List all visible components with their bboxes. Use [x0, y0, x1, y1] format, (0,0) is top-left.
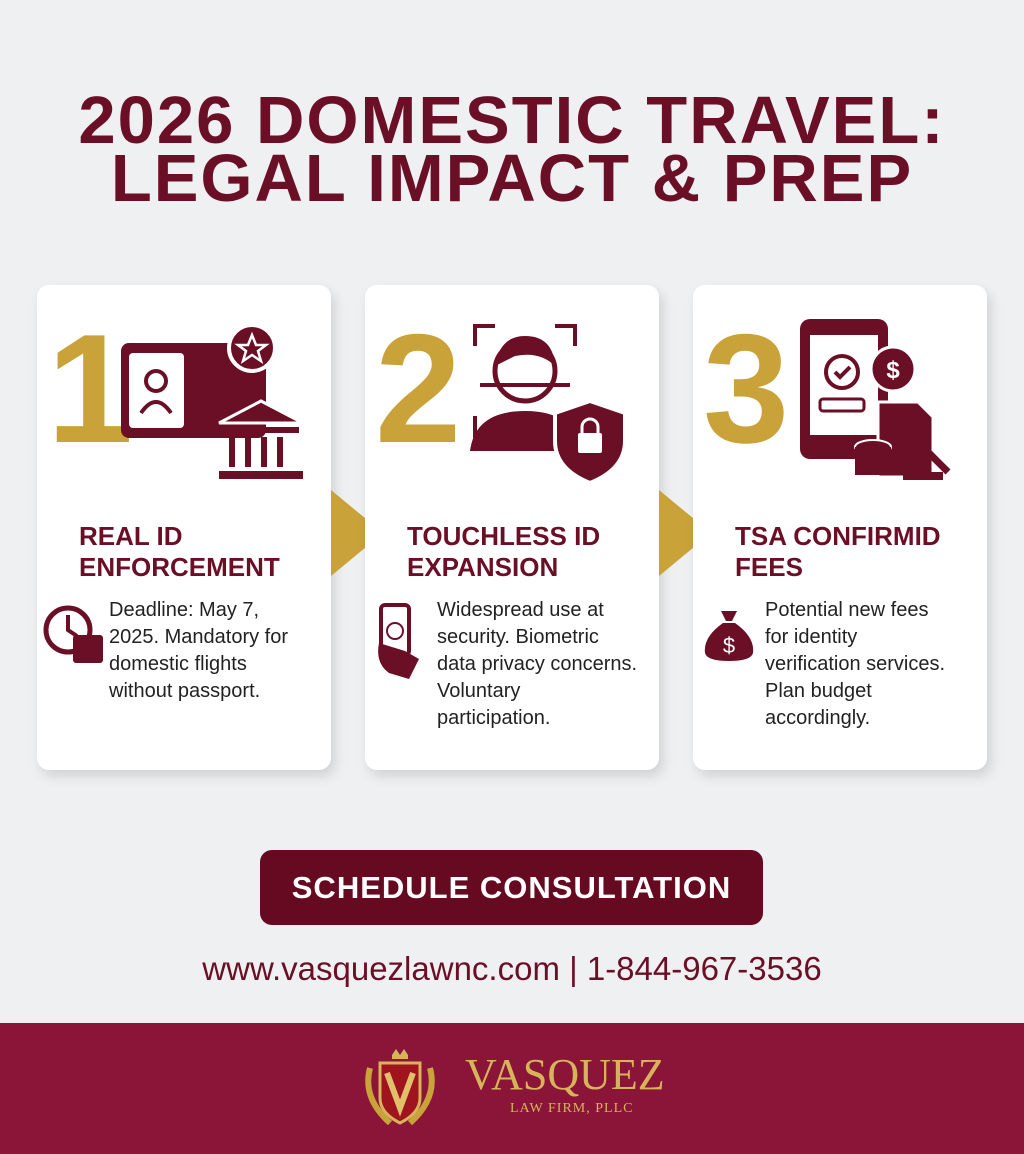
button: schedule consultation [260, 850, 763, 925]
body text: Potential new fees [765, 599, 928, 621]
body text: domestic flights [109, 653, 247, 675]
crest [365, 1049, 435, 1126]
icon: phone fees: $ [886, 357, 900, 384]
body text: participation. [437, 707, 550, 729]
body text: data privacy concerns. [437, 653, 637, 675]
body text: security. Biometric [437, 626, 599, 648]
body text [109, 599, 288, 702]
body text [437, 599, 637, 729]
panel: touchless id [365, 285, 659, 770]
wordmark: VASQUEZ [465, 1050, 665, 1099]
heading: TSA CONFIRMID [735, 521, 941, 551]
panel: tsa fees [693, 285, 987, 770]
heading [407, 521, 600, 582]
title [78, 83, 946, 216]
body text [765, 599, 945, 729]
arrow [331, 490, 383, 576]
icon: clock [44, 606, 103, 663]
body text: without passport. [109, 680, 260, 702]
logo: LAW FIRM, PLLC [510, 1101, 633, 1116]
title: 2026 DOMESTIC TRAVEL: [78, 83, 946, 158]
heading: ENFORCEMENT [79, 552, 280, 582]
body text: Voluntary [437, 680, 520, 702]
body text: Widespread use at [437, 599, 604, 621]
heading: REAL ID [79, 521, 183, 551]
number 3: 3 [703, 302, 789, 475]
arrow [659, 490, 711, 576]
icon: phone fees [800, 319, 950, 480]
body text: Plan budget [765, 680, 872, 702]
icon: money bag: $ [723, 633, 735, 658]
title: LEGAL IMPACT & PREP [111, 141, 913, 216]
icon: face scan [470, 324, 624, 481]
body text: verification services. [765, 653, 945, 675]
button: schedule consultation: SCHEDULE CONSULTATION [292, 870, 731, 905]
body text: accordingly. [765, 707, 870, 729]
logo [365, 1049, 665, 1126]
footer [0, 1023, 1024, 1154]
number 2: 2 [375, 302, 461, 475]
heading: FEES [735, 552, 803, 582]
body text: 2025. Mandatory for [109, 626, 288, 648]
body text: for identity [765, 626, 857, 648]
body text: Deadline: May 7, [109, 599, 259, 621]
heading [735, 521, 941, 582]
number 1: 1 [47, 302, 133, 475]
heading: EXPANSION [407, 552, 558, 582]
heading: TOUCHLESS ID [407, 521, 600, 551]
icon: id card [121, 327, 303, 479]
icon: phone fingerprint [378, 603, 419, 679]
icon: money bag [704, 611, 754, 661]
contact line: www.vasquezlawnc.com | 1-844-967-3536 [202, 950, 822, 987]
panel: real id [37, 285, 331, 770]
heading [79, 521, 280, 582]
